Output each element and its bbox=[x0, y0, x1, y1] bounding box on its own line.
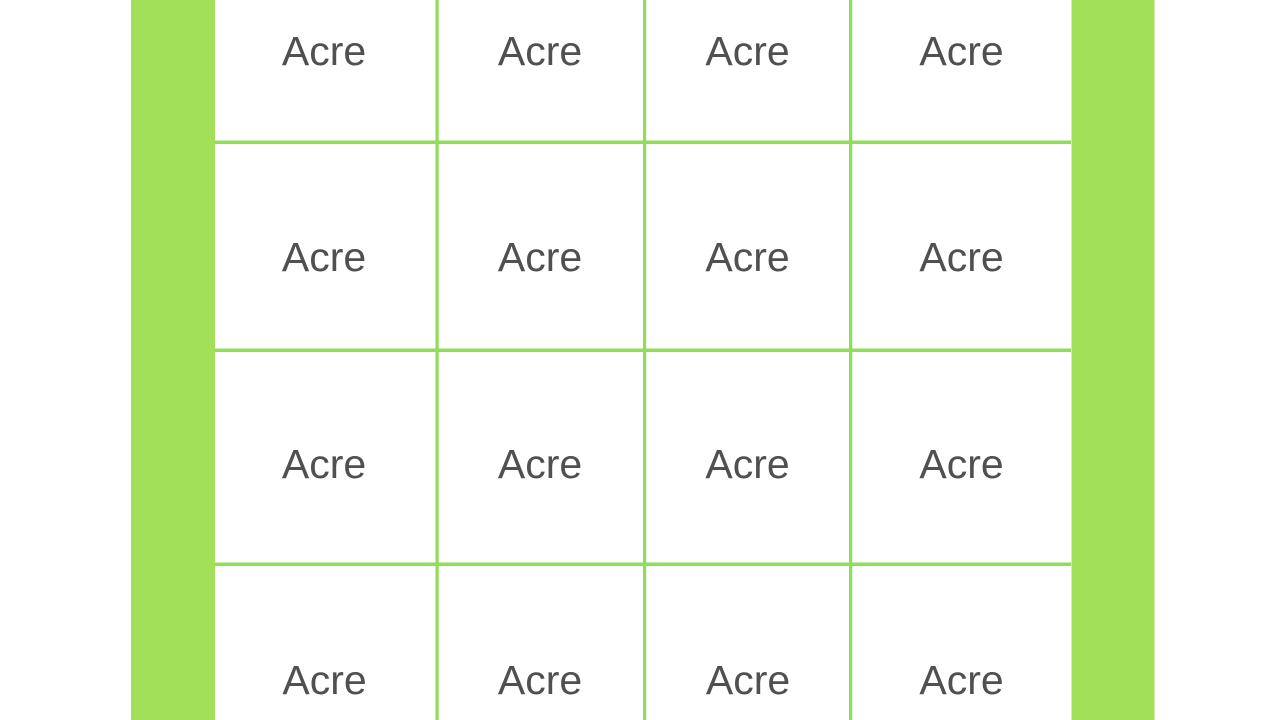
right green side bar bbox=[1072, 0, 1154, 720]
row 1 labels: Acre bbox=[282, 28, 366, 74]
row 3 labels: Acre bbox=[282, 441, 366, 487]
row 1 labels bbox=[282, 28, 1004, 74]
row 3 labels: Acre bbox=[919, 441, 1004, 487]
row 4 labels: Acre bbox=[282, 657, 367, 703]
row 3 labels: Acre bbox=[705, 441, 790, 487]
row 2 labels: Acre bbox=[919, 234, 1004, 280]
row 1 labels: Acre bbox=[498, 28, 582, 74]
row 1 labels: Acre bbox=[705, 28, 790, 74]
grid lines bbox=[215, 0, 1071, 720]
row 2 labels: Acre bbox=[282, 234, 366, 280]
row 4 labels: Acre bbox=[919, 657, 1004, 703]
row 4 labels: Acre bbox=[706, 657, 790, 703]
row 4 labels bbox=[282, 657, 1004, 703]
row 2 labels: Acre bbox=[498, 234, 582, 280]
row 2 labels bbox=[282, 234, 1004, 280]
left green side bar bbox=[131, 0, 215, 720]
row 3 labels: Acre bbox=[498, 441, 582, 487]
row 4 labels: Acre bbox=[498, 657, 582, 703]
row 2 labels: Acre bbox=[705, 234, 790, 280]
row 1 labels: Acre bbox=[919, 28, 1004, 74]
row 3 labels bbox=[282, 441, 1004, 487]
